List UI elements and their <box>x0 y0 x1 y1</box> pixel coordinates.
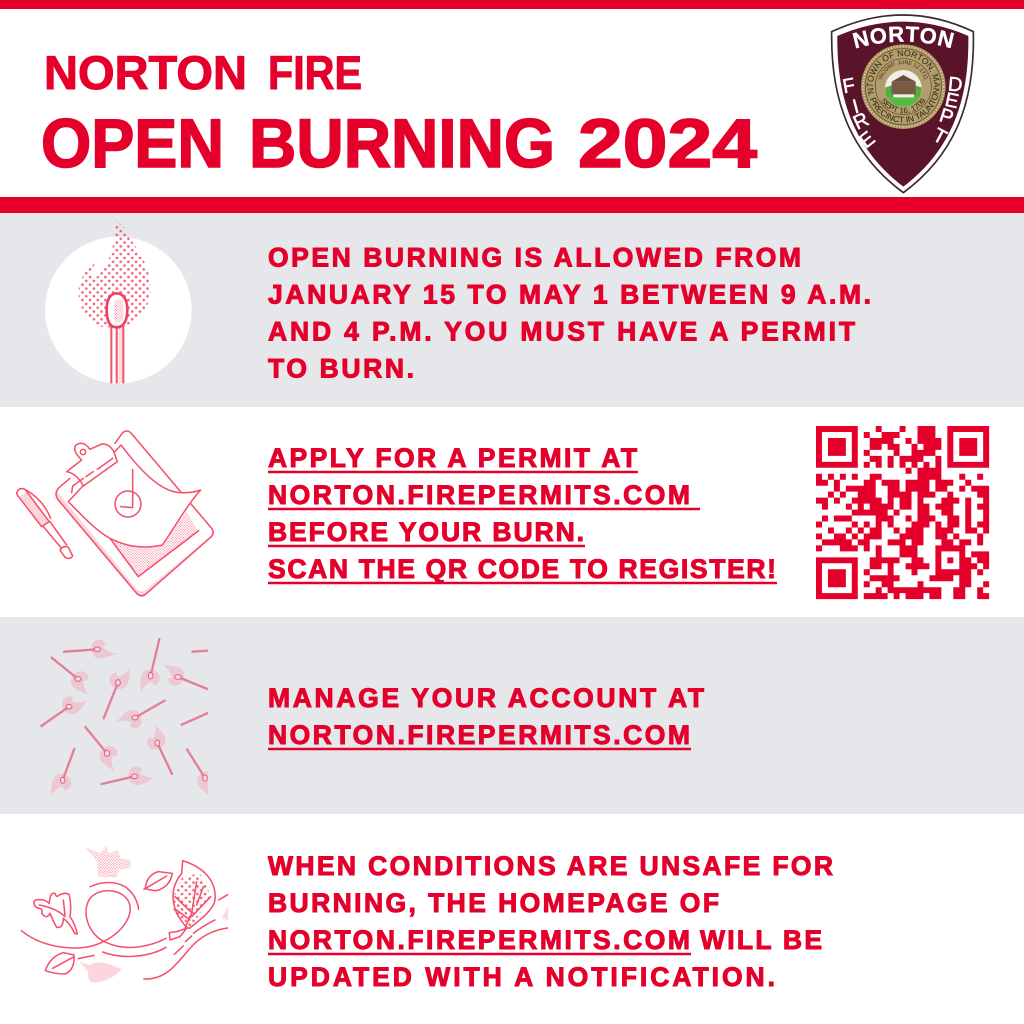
badge seal <box>861 44 946 129</box>
icon: clipboard and pen <box>17 431 214 596</box>
title: BURNING <box>249 105 555 182</box>
text: apply: NORTON.FIREPERMITS.COM <box>268 480 690 510</box>
text: unsafe conditions: WHEN CONDITIONS ARE UNSAFE FOR <box>268 851 833 881</box>
text: apply: BEFORE YOUR BURN. <box>268 517 584 547</box>
text: dates: OPEN BURNING IS ALLOWED FROM <box>268 242 801 272</box>
title: FIRE <box>268 46 362 99</box>
text: apply: SCAN THE QR CODE TO REGISTER! <box>268 554 776 584</box>
text: apply: APPLY FOR A PERMIT AT <box>268 443 637 473</box>
text: dates: AND 4 P.M. YOU MUST HAVE A PERMIT <box>268 316 855 346</box>
badge: Norton Fire Dept shield: R <box>850 109 872 135</box>
panel: apply for a permit <box>0 407 1024 617</box>
text: unsafe conditions: NORTON.FIREPERMITS.COM <box>268 925 690 955</box>
badge: Norton Fire Dept shield: T <box>929 124 950 149</box>
icon: lit match <box>45 219 192 383</box>
badge: Norton Fire Dept shield: E <box>855 127 879 153</box>
icon: scattered matches <box>40 638 208 796</box>
title: NORTON <box>44 46 247 99</box>
text: unsafe conditions: UPDATED WITH A NOTIFICATION. <box>268 962 775 992</box>
badge seal: N. PRECINCT IN TAUNTON <box>867 88 940 123</box>
badge seal: TOWN OF NORTON, MA <box>866 50 940 88</box>
text: unsafe conditions: WILL BE <box>700 925 822 955</box>
text: apply <box>268 443 777 584</box>
panel: manage account <box>0 617 1024 814</box>
text: manage account: NORTON.FIREPERMITS.COM <box>268 720 690 750</box>
badge: Norton Fire Dept shield: I <box>850 96 861 118</box>
title <box>41 46 757 182</box>
badge seal: INCORP. JUNE 12 1711 <box>878 60 928 80</box>
badge: Norton Fire Dept shield: NORTON <box>852 26 954 48</box>
text: dates: JANUARY 15 TO MAY 1 BETWEEN 9 A.M. <box>268 280 871 310</box>
badge: Norton Fire Dept shield: F <box>841 74 857 98</box>
badge: Norton Fire Dept shield: E <box>943 89 961 113</box>
header panel <box>0 0 1024 213</box>
badge: Norton Fire Dept shield: P <box>937 104 956 129</box>
text: dates <box>268 242 871 384</box>
badge: Norton Fire Dept shield: D <box>947 73 963 97</box>
panel: open burning dates <box>0 213 1024 407</box>
text: unsafe conditions: BURNING, THE HOMEPAGE OF <box>268 888 719 918</box>
panel: unsafe conditions <box>21 845 833 992</box>
text: unsafe conditions <box>268 851 833 992</box>
title: OPEN <box>41 105 224 182</box>
title: 2024 <box>578 105 757 182</box>
text: manage account <box>268 683 704 750</box>
QR code <box>816 426 989 599</box>
text: manage account: MANAGE YOUR ACCOUNT AT <box>268 683 704 713</box>
badge: Norton Fire Dept shield <box>830 14 974 194</box>
badge seal: SEPT 16, 1709 <box>881 98 925 114</box>
text: dates: TO BURN. <box>268 354 414 384</box>
icon: wind and leaves <box>21 845 228 983</box>
